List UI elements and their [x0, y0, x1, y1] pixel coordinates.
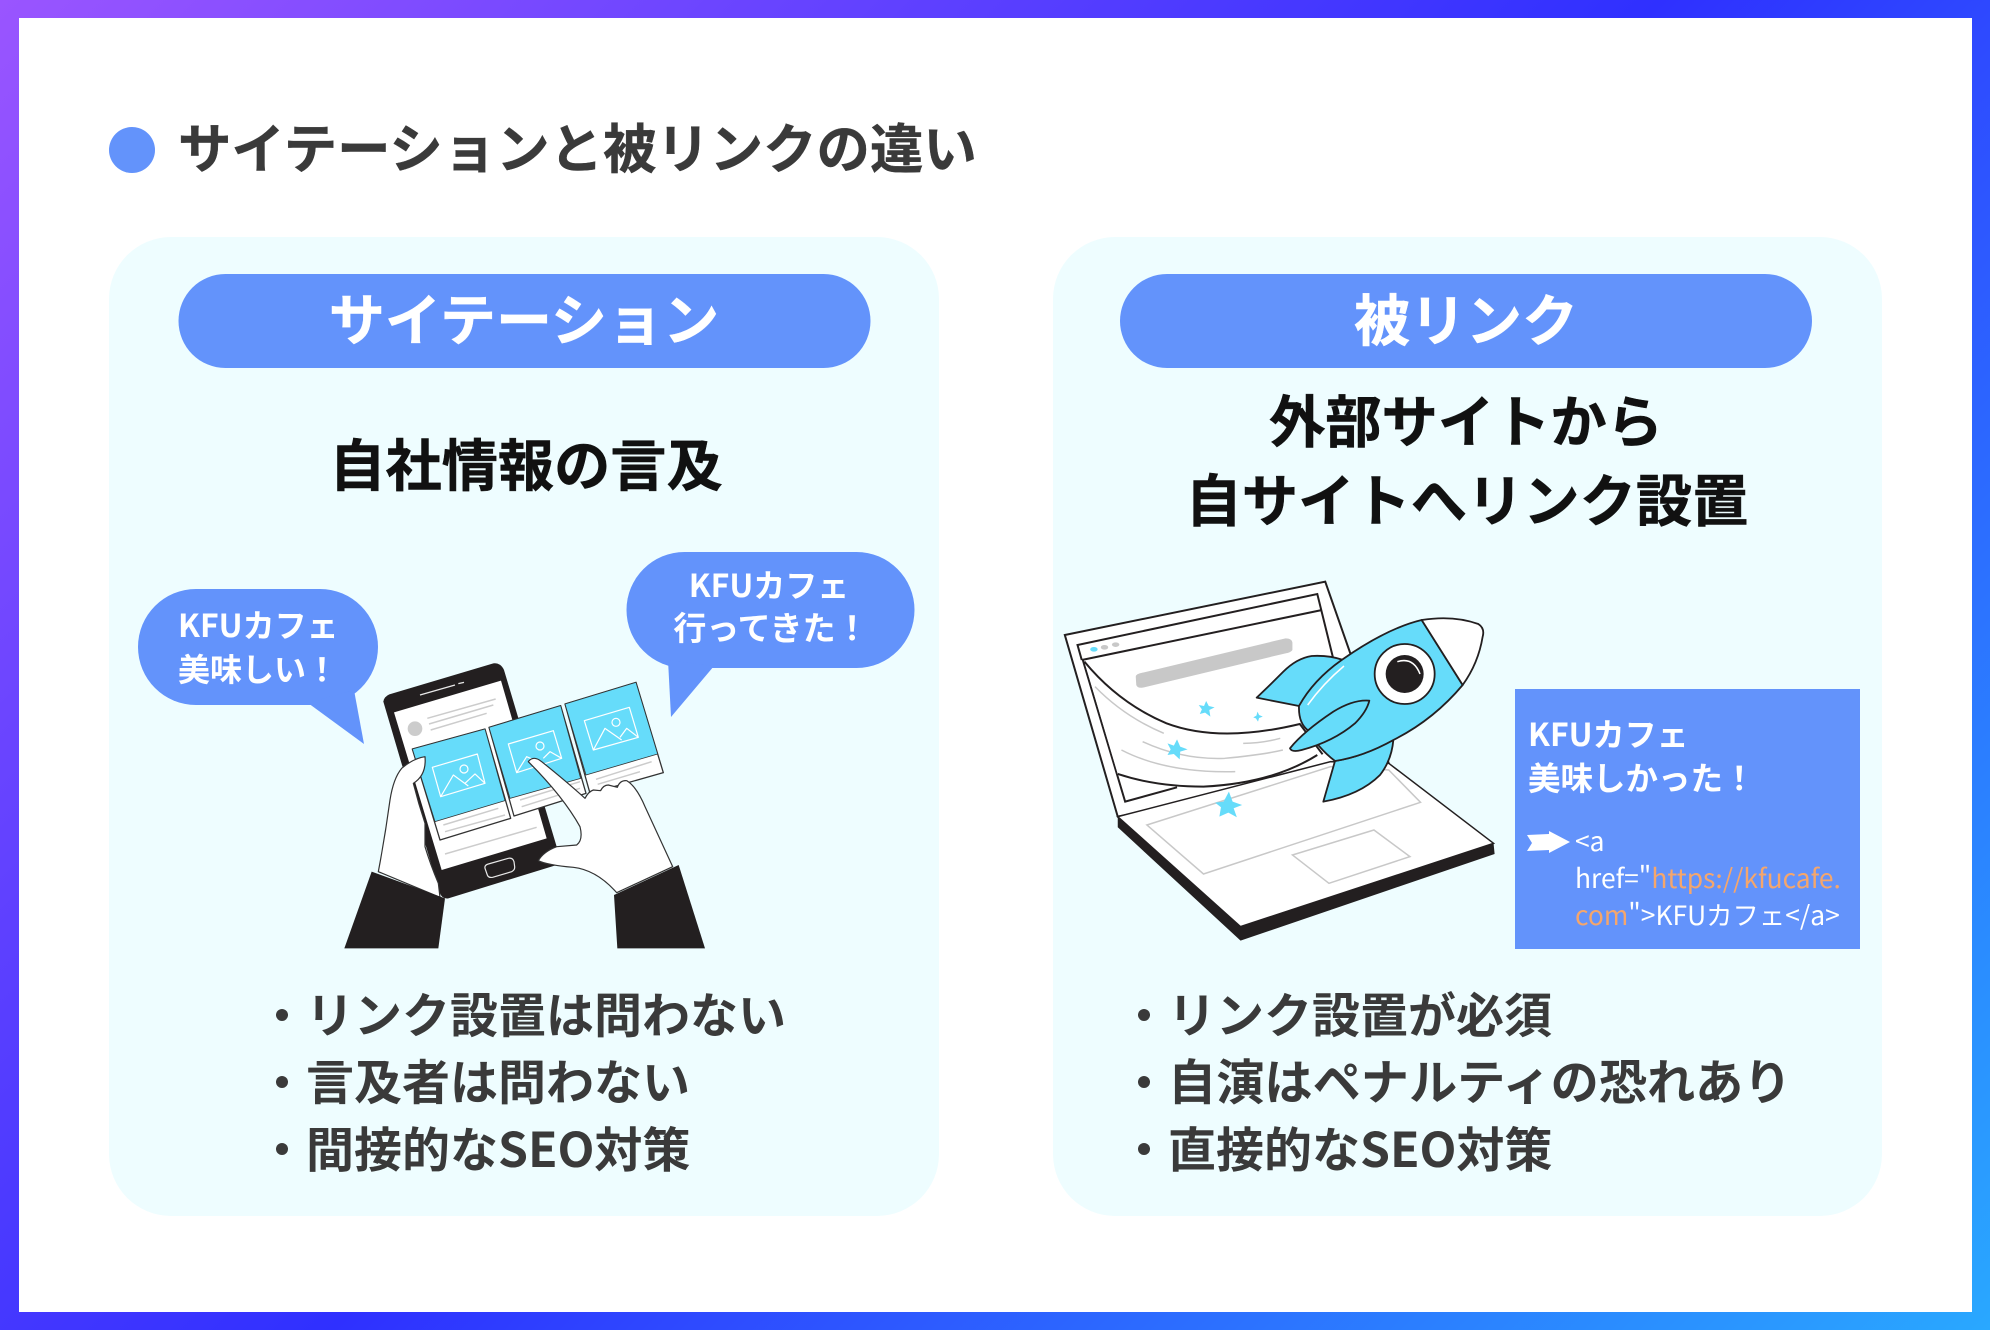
speech bubble right: 行ってきた！ — [673, 602, 869, 650]
backlink pill heading — [1120, 274, 1812, 368]
backlink subheading: 外部サイトから — [1269, 378, 1663, 459]
backlink feature list — [1138, 976, 1792, 1181]
code example box: 美味しかった！ — [1528, 753, 1756, 800]
citation feature list — [276, 976, 786, 1181]
backlink feature list: リンク設置が必須 — [1168, 976, 1552, 1046]
illustration: rocket — [1257, 618, 1483, 802]
citation feature list: 言及者は問わない — [306, 1044, 690, 1114]
code example box: KFUカフェ — [1528, 710, 1689, 756]
title: サイテーションと被リンクの違い — [178, 107, 977, 184]
citation feature list: 間接的なSEO対策 — [306, 1111, 690, 1181]
speech bubble right — [626, 552, 914, 717]
backlink subheading — [1186, 378, 1748, 538]
citation pill heading — [178, 274, 870, 368]
panel: citation — [109, 237, 939, 1216]
backlink pill heading: 被リンク — [1354, 277, 1578, 358]
backlink feature list: 自演はペナルティの恐れあり — [1168, 1044, 1792, 1114]
speech bubble left: KFUカフェ — [178, 601, 339, 647]
code example box — [1515, 689, 1860, 949]
speech bubble right: KFUカフェ — [689, 561, 849, 607]
backlink feature list: 直接的なSEO対策 — [1168, 1111, 1552, 1181]
illustration: hands holding smartphone — [344, 663, 705, 948]
code example box: com">KFUカフェ</a> — [1575, 894, 1840, 933]
code example box: <a — [1575, 820, 1605, 859]
backlink subheading: 自サイトへリンク設置 — [1186, 457, 1748, 538]
code example box: href="https://kfucafe. — [1575, 857, 1841, 896]
illustration: laptop — [1065, 582, 1495, 941]
speech bubble left: 美味しい！ — [178, 645, 338, 691]
icon: arrow — [1527, 831, 1570, 853]
citation subheading: 自社情報の言及 — [329, 422, 723, 503]
citation feature list: リンク設置は問わない — [306, 976, 786, 1046]
speech bubble left — [138, 589, 378, 744]
citation pill heading: サイテーション — [329, 276, 719, 358]
panel: backlink — [1053, 237, 1882, 1216]
